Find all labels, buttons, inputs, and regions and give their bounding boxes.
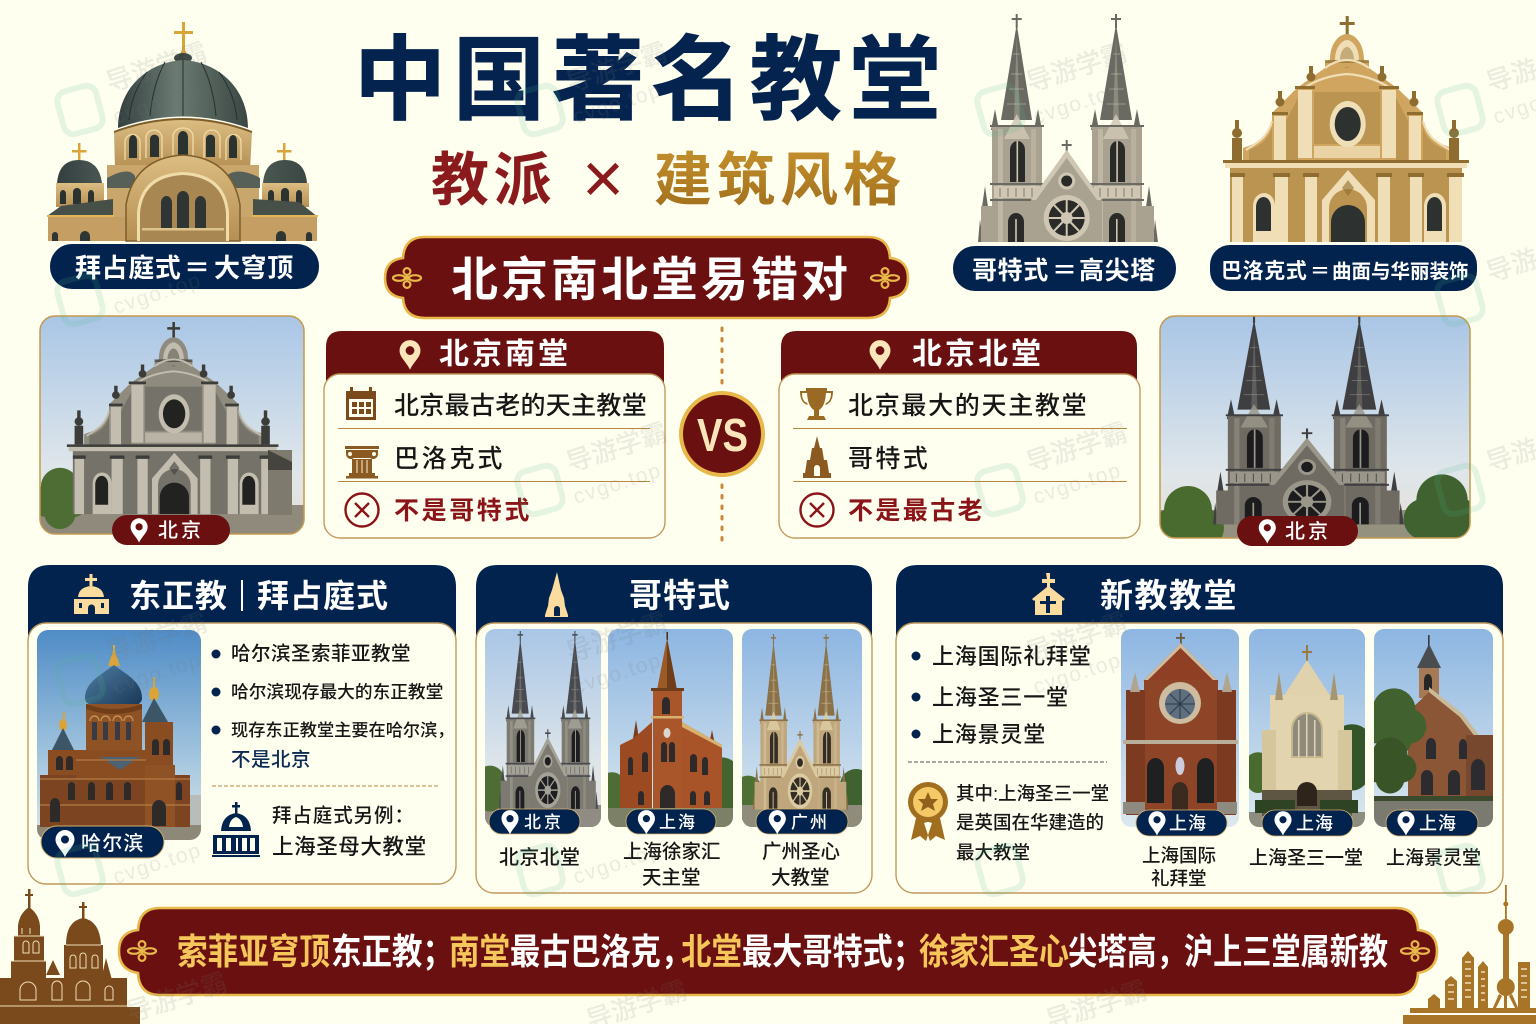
photo: Beijing North Church [485,629,601,827]
main title: 中国著名教堂 [354,30,948,132]
comparison card: Beijing South Church: 巴洛克式 [394,445,505,473]
label pill: Baroque = curves and ornate decoration [1210,245,1477,291]
watermark overlay: 导游学霸 [103,37,211,98]
location pill: Beijing: 北京 [524,813,564,832]
watermark overlay: cvgo.top [1030,79,1124,129]
location pill: Shanghai: 上海 [659,813,697,832]
watermark overlay: 导游学霸 [103,607,211,668]
location pill: Harbin [41,826,164,858]
location pill: Guangzhou [756,809,848,834]
bullet list [912,644,1092,747]
watermark overlay: 导游学霸 [563,417,671,478]
label pill: Byzantine = dome [50,244,319,289]
photo: Holy Trinity Church [1249,629,1365,827]
comparison card: Beijing South Church [324,331,665,538]
watermark overlay: cvgo.top [1030,649,1124,699]
footer banner: summary mnemonic [119,908,1437,995]
note: Holy Trinity [956,783,1109,863]
bullet list: 哈尔滨现存最大的东正教堂 [231,682,443,702]
note: other Byzantine example: 拜占庭式另例： [272,805,415,827]
subtitle: denomination x architectural style: 教派 [431,148,556,213]
bullet list: 上海国际礼拜堂 [932,644,1092,669]
name: Shanghai Community Church: 上海国际 [1142,845,1216,866]
label pill: Gothic = tall spire [953,246,1176,291]
location pill: Beijing (left photo): 北京 [158,519,204,542]
location pill: Beijing (right photo): 北京 [1285,520,1331,543]
watermark overlay: cvgo.top [570,459,664,509]
bullet list: 上海景灵堂 [932,722,1046,747]
footer banner: summary mnemonic: 南堂 [449,931,510,972]
note: Holy Trinity: 其中:上海圣三一堂 [956,783,1109,804]
photo: Beijing North Church [1159,315,1471,539]
panel header: 新教教堂 [1100,577,1238,614]
name: Xujiahui Cathedral [623,841,721,889]
panel header [476,565,872,650]
photo: Shanghai Community Church [1121,629,1239,827]
watermark overlay: 导游学霸 [1023,37,1131,98]
icon: trophy [800,388,833,420]
footer banner: summary mnemonic: 最古巴洛克， [510,931,691,972]
name: Holy Trinity: 上海圣三一堂 [1249,847,1363,869]
subtitle: denomination x architectural style: 建筑风格 [654,148,906,213]
skyline: Shanghai with Oriental Pearl Tower [1403,885,1536,1024]
panel: Protestant [896,565,1503,893]
name: Xujiahui Cathedral: 天主堂 [642,867,701,889]
comparison card: Beijing South Church: 不是哥特式 [394,497,532,525]
name: Sacred Heart Cathedral: 广州圣心 [762,841,840,863]
label pill: Gothic = tall spire: 哥特式 [972,257,1049,285]
location pill: Shanghai [1262,810,1353,836]
panel header: 拜占庭式 [257,578,389,614]
footer banner: summary mnemonic: 东正教； [331,931,453,972]
comparison card: Beijing North Church: 北京北堂 [912,338,1044,371]
footer banner: summary mnemonic: 最大哥特式； [742,931,923,972]
skyline: Harbin churches silhouette [0,889,140,1024]
location pill: Harbin: 哈尔滨 [81,832,145,855]
location pill: Beijing (right photo) [1237,516,1358,546]
note: Holy Trinity: 是英国在华建造的 [956,812,1104,833]
footer banner: summary mnemonic: 尖塔高， [1068,931,1186,972]
location pill: Guangzhou: 广州 [791,813,829,832]
name: Grace Church: 上海景灵堂 [1386,847,1481,869]
footer banner: summary mnemonic: 索菲亚穹顶 [177,931,330,972]
photo: Beijing South Church [31,316,304,535]
watermark overlay: cvgo.top [110,649,204,699]
label pill: Gothic = tall spire: ＝ [1052,257,1078,285]
panel header [28,565,456,650]
label pill: Baroque = curves and ornate decoration: 巴洛克式 [1221,260,1307,283]
icon: domed cathedral [212,802,260,857]
location pill: Beijing (left photo) [112,515,230,545]
label pill: Byzantine = dome: 拜占庭式 [75,253,181,283]
name: Shanghai Community Church: 礼拜堂 [1151,868,1207,889]
illustration: Gothic church with twin spires [978,14,1158,242]
footer banner: summary mnemonic: 徐家汇圣心 [919,931,1069,972]
icon: Gothic tower [803,436,831,478]
location pill: Shanghai: 上海 [1419,814,1457,834]
icon: classical column [345,446,379,478]
label pill: Byzantine = dome: 大穹顶 [214,253,294,283]
name: Sacred Heart Cathedral [762,841,840,889]
name: Sacred Heart Cathedral: 大教堂 [771,867,830,889]
photo: Grace Church Shanghai [1362,629,1493,827]
label pill: Gothic = tall spire: 高尖塔 [1079,257,1156,285]
label pill: Baroque = curves and ornate decoration: 曲面与华丽装饰 [1332,261,1469,283]
footer banner: summary mnemonic: 沪上三堂属新教 [1184,931,1388,972]
VS badge: VS [697,409,748,461]
watermark overlay: 导游学霸 [563,607,671,668]
watermark overlay: cvgo.top [570,839,664,889]
location pill: Shanghai: 上海 [1169,814,1207,834]
comparison card: Beijing South Church: 北京南堂 [439,338,571,371]
icon: cross in circle [346,494,378,526]
comparison card: Beijing North Church [779,331,1140,538]
watermark overlay: cvgo.top [570,649,664,699]
comparison card: Beijing North Church: 哥特式 [848,445,930,473]
bullet list [212,643,454,771]
VS badge [681,393,763,475]
panel header [896,565,1503,650]
dotted divider above VS [720,328,724,385]
banner: Beijing south and north churches [385,237,908,318]
banner: Beijing south and north churches: 北京南北堂易错对 [451,253,851,306]
name: Xujiahui Cathedral: 上海徐家汇 [623,841,721,863]
watermark overlay: 导游学霸 [1023,417,1131,478]
location pill: Shanghai [1136,810,1227,836]
location pill: Shanghai [626,809,716,834]
icon: calendar [346,387,376,420]
icon: gold medal [908,782,948,841]
watermark overlay: 导游学霸 [1023,607,1131,668]
panel: Orthodox / Byzantine [28,565,456,884]
location pill: Beijing [489,809,580,834]
dotted divider below VS [720,485,724,540]
bullet list: 哈尔滨圣索菲亚教堂 [231,643,411,665]
subtitle: denomination x architectural style: × [582,139,624,219]
photo: Sacred Heart Cathedral Guangzhou [742,629,862,827]
comparison card: Beijing South Church: 北京最古老的天主教堂 [394,392,647,420]
location pill: Shanghai: 上海 [1296,814,1334,834]
bullet list: 不是北京 [231,749,311,771]
label pill: Byzantine = dome: ＝ [184,253,211,283]
watermark overlay: cvgo.top [110,839,204,889]
photo: Saint Sophia Cathedral Harbin [37,630,201,840]
name: Beijing North Church: 北京北堂 [499,846,580,869]
illustration: Baroque church facade [1223,16,1469,242]
watermark overlay: cvgo.top [570,79,664,129]
bullet list: 现存东正教堂主要在哈尔滨， [231,720,454,740]
comparison card: Beijing North Church: 北京最大的天主教堂 [848,392,1088,420]
watermark overlay: cvgo.top [110,79,204,129]
comparison card: Beijing North Church: 不是最古老 [848,497,985,525]
watermark overlay: cvgo.top [1030,459,1124,509]
watermark overlay: cvgo.top [110,269,204,319]
panel: Gothic [468,565,880,893]
panel header: 东正教 [129,578,228,614]
label pill: Baroque = curves and ornate decoration: ＝ [1310,261,1330,283]
subtitle: denomination x architectural style [431,139,906,219]
watermark overlay: 导游学霸 [563,37,671,98]
illustration: Byzantine church with dome [47,22,318,241]
panel header: 哥特式 [629,577,731,614]
name: Shanghai Community Church [1142,845,1216,889]
panel: Orthodox / Byzantine: 上海圣母大教堂 [272,835,427,859]
bullet list: 上海圣三一堂 [932,685,1069,710]
footer banner: summary mnemonic: 北堂 [681,931,742,972]
icon: cross in circle [800,494,834,526]
location pill: Shanghai [1386,810,1478,836]
note: Holy Trinity: 最大教堂 [956,842,1030,863]
photo: Xujiahui Cathedral Shanghai [608,629,733,827]
